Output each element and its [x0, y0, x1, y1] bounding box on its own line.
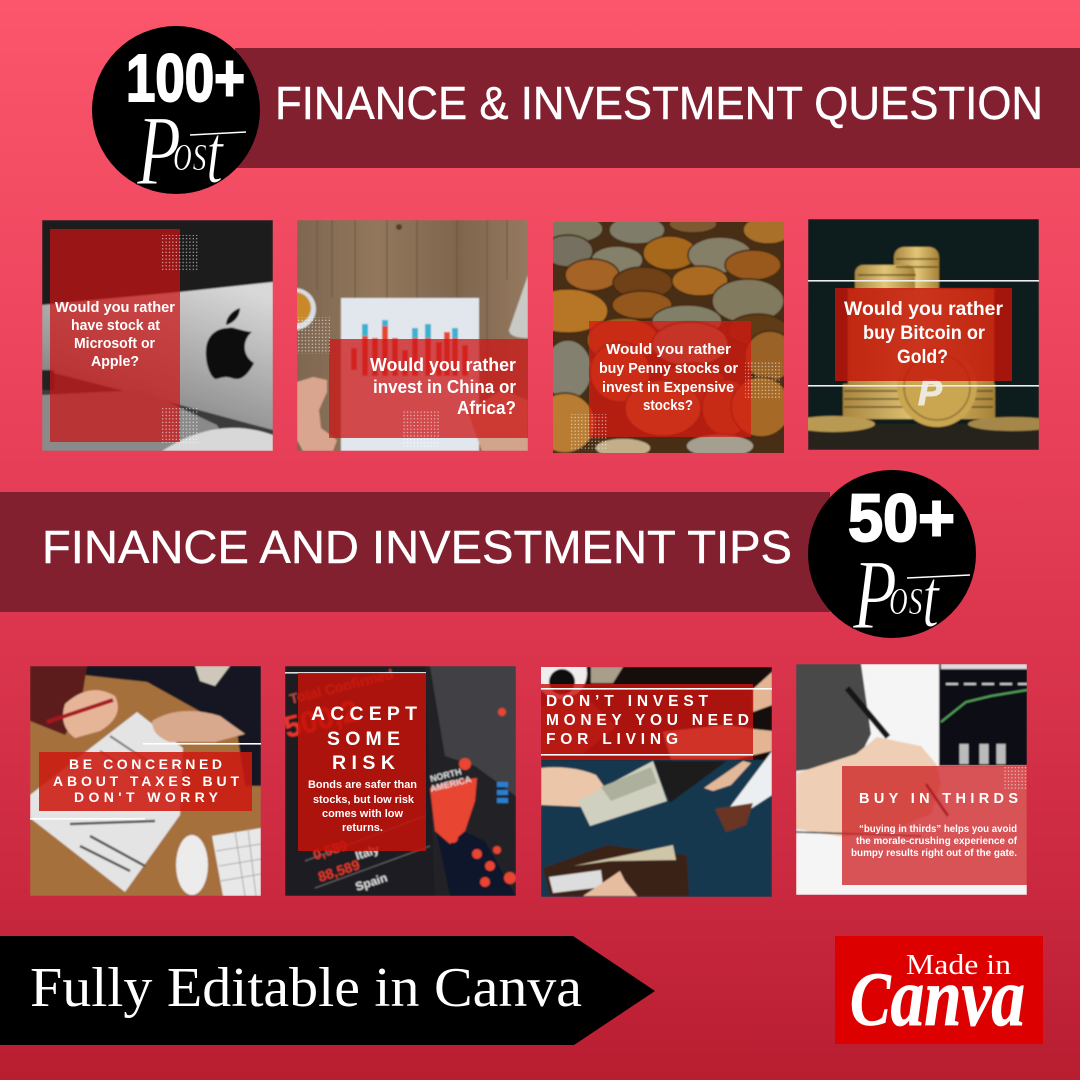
- icon: apple logo: [206, 308, 254, 379]
- wallet top: [653, 761, 727, 803]
- badge: 100+ post: [92, 26, 260, 206]
- badge: 50+ post: [808, 470, 976, 650]
- tip text: the morale-crushing experience of: [856, 836, 1018, 847]
- question text: buy Bitcoin or: [863, 322, 985, 344]
- tip heading: BUY IN THIRDS: [859, 791, 1018, 807]
- arrow banner: fully editable in canva: [0, 936, 655, 1045]
- tip text: DON'T WORRY: [74, 789, 219, 805]
- card: accept some risk: Spain: [354, 870, 389, 894]
- banner: finance and investment tips: [0, 492, 830, 612]
- question text: Would you rather: [606, 342, 731, 358]
- keyboard: [212, 828, 261, 896]
- tip text: FOR LIVING: [546, 731, 678, 748]
- badge: 100+ post: P: [136, 94, 181, 206]
- wallet: [543, 845, 689, 896]
- card: accept some risk: 500,2: [281, 695, 362, 745]
- tip text: comes with low: [322, 808, 403, 820]
- question text: have stock at: [71, 318, 160, 334]
- tip heading: ACCEPT: [311, 703, 417, 725]
- tip text: BE CONCERNED: [69, 756, 222, 772]
- card: china or africa: [297, 220, 528, 451]
- question text: invest in China or: [373, 377, 516, 397]
- question text: stocks?: [643, 398, 693, 414]
- card: buy in thirds: [796, 664, 1027, 895]
- question text: invest in Expensive: [602, 380, 734, 396]
- hands: [63, 690, 118, 738]
- map hotspots: [430, 708, 516, 887]
- hand and bills: [541, 767, 610, 807]
- hands: [297, 377, 337, 451]
- hands at top: [663, 725, 772, 759]
- question text: [370, 355, 516, 418]
- badge: 50+ post: P: [852, 538, 897, 650]
- tip text: [546, 693, 749, 748]
- question text: [599, 342, 738, 414]
- icon: coin symbol: P: [918, 372, 943, 413]
- tip text: stocks, but low risk: [313, 794, 415, 806]
- card: accept some risk: 88,589: [316, 856, 362, 885]
- mouse: [176, 835, 208, 895]
- tip heading: RISK: [332, 752, 395, 774]
- card: accept some risk: [281, 666, 516, 896]
- question text: Microsoft or: [74, 336, 155, 352]
- tip text: “buying in thirds” helps you avoid: [859, 824, 1017, 835]
- tip heading: SOME: [327, 728, 400, 750]
- tip text: [53, 756, 239, 805]
- hand: [796, 737, 941, 837]
- card: bitcoin or gold: [808, 219, 1039, 450]
- tip text: Bonds are safer than: [308, 779, 417, 791]
- badge: 50+ post: t: [922, 551, 940, 644]
- banner: finance and investment question: [235, 48, 1080, 168]
- badge: 50+ post: 50+: [848, 481, 955, 556]
- heading: finance and investment tips: FINANCE AND INVESTMENT TIPS: [42, 521, 792, 573]
- card: taxes: [30, 666, 261, 896]
- question text: Would you rather: [370, 355, 516, 375]
- question text: Would you rather: [55, 300, 175, 316]
- question text: Would you rather: [844, 298, 1003, 320]
- question text: [55, 300, 175, 370]
- tip heading: [311, 703, 417, 774]
- card: accept some risk: AMERICA: [429, 774, 473, 794]
- card: penny or expensive stocks: [553, 222, 784, 453]
- coin stacks: [894, 247, 939, 297]
- arrow banner: fully editable in canva: Fully Editable in Canva: [30, 957, 582, 1019]
- tip text: DON’T INVEST: [546, 693, 709, 710]
- tip text: ABOUT TAXES BUT: [53, 773, 239, 789]
- data rows: [305, 816, 430, 888]
- card: microsoft or apple: [42, 220, 273, 451]
- card: accept some risk: 0,589: [311, 837, 349, 863]
- tip text: [308, 779, 417, 834]
- question text: buy Penny stocks or: [599, 361, 738, 377]
- tip text: bumpy results right out of the gate.: [851, 848, 1017, 859]
- papers: [30, 712, 183, 892]
- question text: [844, 298, 1003, 368]
- badge: 100+ post: t: [206, 107, 224, 200]
- question text: Apple?: [91, 354, 139, 370]
- card: accept some risk: Italy: [354, 842, 381, 863]
- question text: Africa?: [457, 398, 516, 418]
- card: money for living: [541, 667, 772, 897]
- tip text: returns.: [342, 822, 383, 834]
- question text: Gold?: [897, 346, 948, 368]
- logo: made in canva: Made in: [906, 949, 1012, 981]
- screen numbers: Total Confirmed: [288, 666, 395, 707]
- badge: 100+ post: os: [173, 123, 208, 183]
- tip text: MONEY YOU NEED: [546, 712, 749, 729]
- heading: finance and investment question: FINANCE & INVESTMENT QUESTION: [275, 77, 1043, 129]
- badge: 100+ post: 100+: [126, 41, 245, 116]
- card: accept some risk: NORTH: [429, 766, 463, 784]
- pen: [847, 688, 888, 737]
- tip text: [851, 824, 1018, 859]
- badge: 50+ post: os: [889, 567, 924, 627]
- logo: made in canva: Canva: [850, 951, 1025, 1044]
